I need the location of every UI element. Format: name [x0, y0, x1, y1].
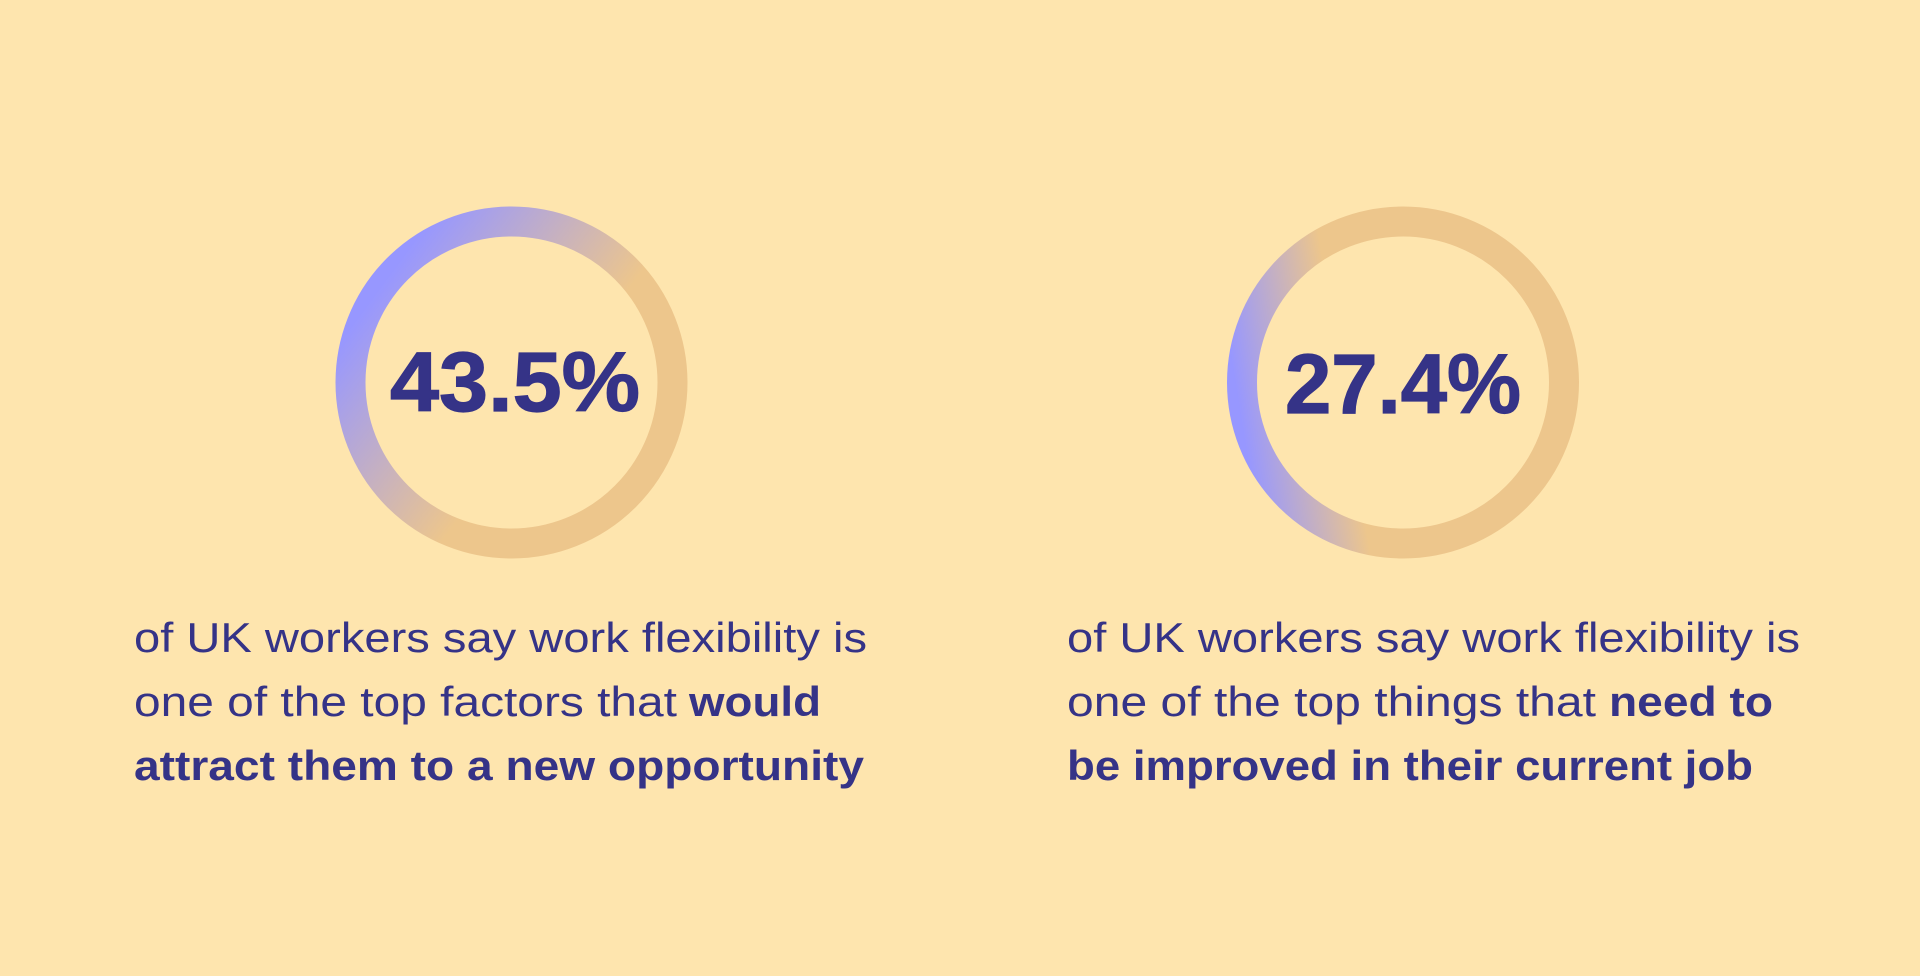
description: attract to new opportunity — [134, 614, 867, 789]
description: attract to new opportunity: one of the top factors that — [134, 678, 677, 725]
description: improve in current job — [1067, 614, 1800, 789]
description: improve in current job: one of the top things that — [1067, 678, 1596, 725]
stat number: 43.5%: 43.5% — [390, 335, 640, 429]
panel: 27.4 percent statistic — [1067, 222, 1800, 789]
description: improve in current job: need to — [1609, 678, 1773, 725]
description: improve in current job: be improved in their current job — [1067, 742, 1753, 789]
donut ring: 27.4% — [1242, 222, 1564, 544]
description: improve in current job: of UK workers say work flexibility is — [1067, 614, 1800, 661]
donut ring: 43.5% — [350, 222, 672, 544]
description: attract to new opportunity: of UK workers say work flexibility is — [134, 614, 867, 661]
panel: 43.5 percent statistic — [134, 222, 867, 789]
stat number: 27.4%: 27.4% — [1285, 337, 1521, 431]
description: attract to new opportunity: would — [688, 678, 821, 725]
description: attract to new opportunity: attract them to a new opportunity — [134, 742, 865, 789]
